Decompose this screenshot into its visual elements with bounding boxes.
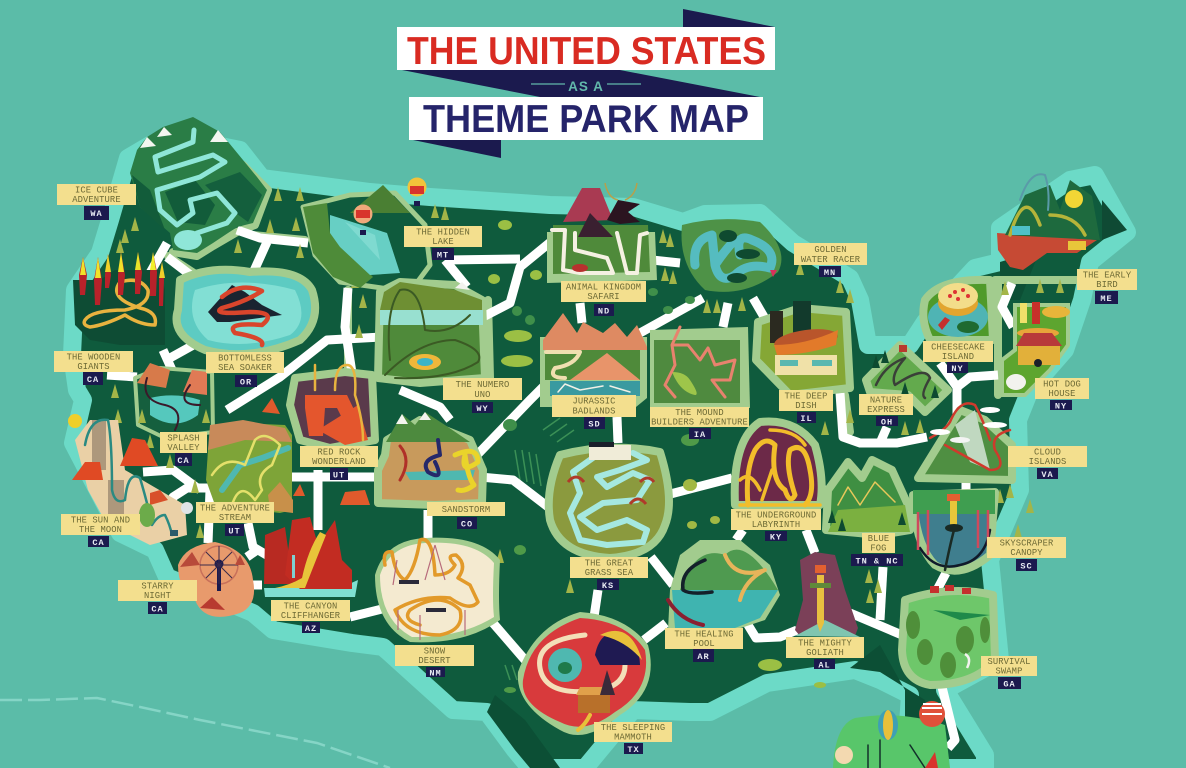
label: The Wooden Giants CA: [54, 351, 133, 385]
label: The Healing Pool AR: [665, 628, 743, 662]
label: Cheesecake Island NY: ISLAND: [942, 352, 974, 362]
label: Red Rock Wonderland UT: [300, 446, 378, 480]
label: Skyscraper Canopy SC: SKYSCRAPER: [1000, 538, 1054, 548]
label: Survival Swamp GA: [981, 656, 1037, 690]
label: The Sleeping Mammoth TX: TX: [627, 745, 640, 755]
scattered trees and bushes: [111, 187, 1064, 693]
label: Bottomless Sea Soaker OR: OR: [240, 378, 252, 388]
clouds: [980, 407, 1000, 413]
label: The Great Grass Sea KS: [570, 557, 648, 591]
label: Jurassic Badlands SD: BADLANDS: [572, 406, 616, 416]
sun: [68, 414, 82, 428]
label: The Numero Uno WY: WY: [476, 404, 489, 414]
sand road: [546, 352, 580, 378]
park: Sandstorm: [378, 412, 483, 505]
yellow veins: [747, 441, 812, 505]
label: The Healing Pool AR: THE HEALING: [674, 630, 734, 640]
moat: [928, 297, 988, 337]
label: Animal Kingdom Safari ND: SAFARI: [587, 292, 620, 302]
red slide: [668, 600, 703, 625]
label: The Canyon Cliffhanger AZ: THE CANYON: [284, 602, 337, 612]
teal rivers: [695, 235, 772, 278]
park: Snow Desert: [375, 538, 500, 642]
green hills: [680, 550, 778, 590]
lake inner: [192, 282, 301, 344]
subtitle: as a: [531, 79, 641, 94]
label: The Mighty Goliath AL: [786, 637, 864, 670]
label: Ice Cube Adventure WA: [57, 184, 136, 220]
label: The Mighty Goliath AL: GOLIATH: [806, 648, 844, 658]
dark trees: [872, 355, 880, 368]
dark forest patches: [132, 172, 262, 230]
label: Animal Kingdom Safari ND: ND: [598, 306, 610, 316]
label: The Canyon Cliffhanger AZ: [271, 600, 350, 634]
cream track: [540, 635, 625, 692]
park: Red Rock Wonderland: [290, 365, 375, 448]
park: The Mighty Goliath: [795, 552, 860, 637]
park: The Underground Labyrinth: [735, 421, 822, 505]
label: The Early Bird ME: THE EARLY: [1083, 270, 1132, 280]
snow peaks: [455, 282, 470, 290]
volcano: [563, 188, 613, 222]
label: Snow Desert NM: NM: [429, 668, 442, 678]
grey rail: [876, 358, 930, 398]
label: Snow Desert NM: DESERT: [418, 656, 451, 666]
label: The Sun and the Moon CA: CA: [92, 538, 105, 548]
coaster arc: [1020, 174, 1049, 210]
label: The Sleeping Mammoth TX: [594, 722, 672, 755]
park: Cheesecake Island: [923, 280, 993, 340]
label: Hot Dog House NY: NY: [1055, 402, 1067, 412]
label: Nature Express OH: NATURE: [870, 396, 902, 406]
lake: [330, 215, 400, 275]
label: Jurassic Badlands SD: SD: [588, 420, 601, 430]
label: Cloud Islands VA: CLOUD: [1034, 448, 1061, 458]
coaster track: [385, 290, 479, 378]
label: The Adventure Stream UT: THE ADVENTURE: [200, 504, 270, 514]
red arches: [305, 395, 359, 436]
mammoth: [595, 632, 640, 665]
park: Florida balloons: [833, 701, 950, 768]
label: Cloud Islands VA: [1008, 446, 1087, 480]
label: Animal Kingdom Safari ND: ANIMAL KINGDOM: [566, 282, 641, 292]
title line 1: THE UNITED STATES: [407, 30, 766, 73]
label: The Mound Builders Adventure IA: BUILDERS ADVENTURE: [651, 418, 748, 428]
label: Starry Night CA: [118, 580, 197, 614]
label: The Wooden Giants CA: CA: [87, 375, 99, 385]
label: Cheesecake Island NY: CHEESECAKE: [931, 342, 985, 352]
red slide: [219, 288, 268, 345]
yellow track: [212, 436, 280, 505]
river: [150, 395, 200, 424]
navy ribbons: [402, 9, 775, 158]
label: Bottomless Sea Soaker OR: [206, 352, 284, 388]
label: Hot Dog House NY: [1035, 378, 1089, 412]
ice track: [155, 130, 235, 242]
dashed sea border line: [0, 698, 390, 768]
label: The Hidden Lake MT: THE HIDDEN: [416, 228, 470, 238]
label: Red Rock Wonderland UT: RED ROCK: [317, 448, 361, 458]
park: Hot Dog House: [1002, 302, 1070, 395]
label: The Wooden Giants CA: GIANTS: [77, 362, 110, 372]
field hatching: [505, 418, 574, 700]
label: The Healing Pool AR: AR: [697, 652, 710, 662]
red rocks: [137, 363, 170, 388]
black island: [208, 285, 282, 322]
teal channel: [405, 470, 475, 480]
label: The Hidden Lake MT: MT: [437, 250, 449, 260]
label: Starry Night CA: NIGHT: [144, 591, 171, 601]
label: Golden Water Racer MN: MN: [824, 268, 836, 278]
park: Bottomless Sea Soaker: [177, 270, 315, 354]
park: Golden Water Racer: [681, 219, 781, 292]
hot air balloon: [354, 204, 372, 235]
label: Ice Cube Adventure WA: ICE CUBE: [75, 186, 118, 196]
park: The Deep Dish: [756, 301, 850, 395]
cheesecake: [938, 283, 978, 316]
coaster: [384, 539, 478, 635]
label: The Numero Uno WY: THE NUMERO: [456, 380, 509, 390]
big peak: [570, 353, 640, 380]
label: Hot Dog House NY: HOUSE: [1049, 389, 1075, 399]
yellow slide: [725, 555, 765, 600]
coaster track: [84, 280, 155, 327]
trestle: [393, 545, 465, 640]
label: The Sun and the Moon CA: THE SUN AND: [71, 516, 130, 526]
park: The Early Bird: [997, 174, 1127, 270]
yellow slide: [275, 532, 326, 588]
label: Nature Express OH: [859, 394, 913, 428]
red cliffs: [264, 527, 293, 584]
label: Survival Swamp GA: GA: [1003, 680, 1016, 690]
label: Splash Valley CA: SPLASH: [167, 434, 200, 444]
park: Skyscraper Canopy: [913, 490, 995, 571]
roads between parks: [107, 230, 1013, 748]
label: The Great Grass Sea KS: GRASS SEA: [585, 568, 634, 578]
label: Cloud Islands VA: ISLANDS: [1029, 457, 1066, 467]
dark islands: [719, 230, 737, 242]
balloon: small: [835, 746, 853, 764]
red mountains: [543, 313, 647, 350]
label: The Underground Labyrinth KY: LABYRINTH: [752, 520, 800, 530]
label: Skyscraper Canopy SC: CANOPY: [1010, 548, 1043, 558]
park: Animal Kingdom Safari: [547, 183, 657, 283]
park: Survival Swamp: [902, 585, 995, 685]
pink trunks: [918, 510, 988, 555]
yellow track: [838, 482, 895, 505]
title line 2: THEME PARK MAP: [423, 98, 749, 141]
label: Bottomless Sea Soaker OR: BOTTOMLESS: [218, 354, 272, 364]
label: Cheesecake Island NY: NY: [951, 364, 964, 374]
label: The Canyon Cliffhanger AZ: CLIFFHANGER: [281, 611, 341, 621]
label: Splash Valley CA: VALLEY: [167, 443, 200, 453]
label: Nature Express OH: EXPRESS: [867, 405, 905, 415]
label: The Hidden Lake MT: [404, 226, 482, 260]
label: The Underground Labyrinth KY: KY: [770, 532, 782, 542]
black slide: [683, 560, 712, 593]
label: Jurassic Badlands SD: [552, 395, 636, 430]
label: Jurassic Badlands SD: JURASSIC: [572, 396, 616, 406]
pale green zones along roads: [168, 165, 1078, 432]
dark mountain: [1005, 180, 1100, 240]
label: Golden Water Racer MN: GOLDEN: [814, 245, 847, 255]
label: The Adventure Stream UT: [196, 502, 274, 536]
label: The Early Bird ME: ME: [1100, 294, 1113, 304]
dark lake rim: [920, 530, 990, 567]
label: The Early Bird ME: BIRD: [1096, 280, 1118, 290]
label: The Mound Builders Adventure IA: [650, 407, 749, 440]
park: Blue Fog: [826, 460, 910, 535]
red signs: [930, 586, 939, 593]
label: The Adventure Stream UT: STREAM: [219, 513, 251, 523]
label: The Canyon Cliffhanger AZ: AZ: [305, 624, 317, 634]
park: The Sun and the Moon: [68, 414, 193, 545]
giant red trees: [79, 252, 165, 306]
label: Red Rock Wonderland UT: WONDERLAND: [312, 457, 366, 467]
label: Red Rock Wonderland UT: UT: [333, 470, 345, 480]
ferris wheel: [200, 546, 238, 591]
label: The Healing Pool AR: POOL: [693, 639, 715, 649]
park: The Numero Uno: [378, 282, 485, 383]
mountain: [350, 185, 410, 213]
label: Survival Swamp GA: SWAMP: [996, 666, 1022, 676]
label: Ice Cube Adventure WA: WA: [90, 209, 103, 219]
red slide: [400, 446, 406, 480]
label: The Deep Dish IL: [779, 390, 833, 424]
teal stream: [222, 448, 288, 490]
label: Blue Fog TN and NC: [851, 533, 903, 566]
park: Jurassic Badlands: [540, 313, 647, 407]
hot dog tent: [1016, 328, 1062, 367]
yellow curves: [1010, 207, 1085, 235]
park: The Great Grass Sea: [549, 442, 669, 558]
label: Survival Swamp GA: SURVIVAL: [987, 657, 1031, 667]
label: The Early Bird ME: [1077, 269, 1137, 304]
label: Hot Dog House NY: HOT DOG: [1043, 380, 1081, 390]
tower: [793, 301, 811, 346]
tower: [950, 495, 957, 525]
label: Snow Desert NM: SNOW: [424, 646, 446, 656]
lodge: [589, 445, 631, 460]
pizza dish: [773, 326, 839, 375]
park: Starry Night: [178, 542, 254, 617]
label: Starry Night CA: STARRY: [141, 582, 174, 592]
red rocks: [120, 438, 158, 466]
label: Sandstorm CO: SANDSTORM: [442, 505, 490, 515]
red bridges: [568, 477, 654, 504]
park: The Hidden Lake: [303, 178, 430, 292]
subtitle: as a: AS A: [568, 79, 604, 94]
olive upper slope: [380, 282, 482, 310]
moose: [605, 183, 640, 224]
park: Nature Express: [866, 345, 948, 412]
label: Cheesecake Island NY: [923, 341, 993, 374]
label: Sandstorm CO: CO: [461, 520, 473, 530]
park: Ice Cube Adventure: [130, 117, 267, 253]
label: The Deep Dish IL: IL: [800, 414, 813, 424]
balloon: yellow and blue: [878, 710, 898, 740]
label: The Sun and the Moon CA: THE MOON: [79, 525, 122, 535]
park: The Healing Pool: [668, 540, 780, 630]
yellow track: [315, 365, 363, 440]
teal fossil strip: [550, 381, 640, 396]
label: Animal Kingdom Safari ND: [561, 281, 646, 316]
label: Cloud Islands VA: VA: [1041, 470, 1054, 480]
label: The Great Grass Sea KS: THE GREAT: [585, 558, 633, 568]
crocodile: [933, 610, 990, 620]
label: The Mighty Goliath AL: AL: [818, 660, 831, 670]
label: Golden Water Racer MN: [794, 243, 867, 278]
buildings: [1020, 303, 1027, 323]
label: Golden Water Racer MN: WATER RACER: [801, 255, 861, 265]
label: The Deep Dish IL: THE DEEP: [784, 392, 828, 402]
label: Bottomless Sea Soaker OR: SEA SOAKER: [218, 363, 273, 373]
golden sword: [817, 575, 824, 623]
label: The Mound Builders Adventure IA: THE MOUND: [675, 408, 724, 418]
white safari track: [552, 230, 647, 273]
label: Splash Valley CA: [160, 432, 207, 466]
label: Splash Valley CA: CA: [177, 456, 190, 466]
yellow slide: [455, 451, 478, 490]
label: Blue Fog TN and NC: TN & NC: [855, 556, 899, 566]
teal pool: [672, 590, 778, 628]
label: Blue Fog TN and NC: FOG: [870, 544, 887, 554]
green coaster: [85, 420, 172, 535]
swamp trees: [906, 611, 920, 639]
light mound: [672, 372, 697, 395]
label: The Great Grass Sea KS: KS: [602, 581, 614, 591]
tan cliffs: [208, 420, 292, 450]
label: Ice Cube Adventure WA: ADVENTURE: [72, 195, 121, 205]
label: The Numero Uno WY: [443, 378, 522, 414]
label: Starry Night CA: CA: [151, 604, 164, 614]
label: The Underground Labyrinth KY: [731, 509, 821, 542]
winding river: [570, 453, 650, 545]
park: Cloud Islands: [918, 403, 1012, 480]
label: Snow Desert NM: [395, 645, 474, 678]
park: The Sleeping Mammoth: [518, 612, 651, 735]
label: The Sleeping Mammoth TX: MAMMOTH: [614, 732, 652, 742]
pool circle: [548, 648, 582, 682]
label: The Underground Labyrinth KY: THE UNDERGROUND: [736, 510, 816, 520]
label: Nature Express OH: OH: [881, 418, 893, 428]
snow peaks: [140, 127, 228, 148]
label: The Mighty Goliath AL: THE MIGHTY: [798, 638, 853, 648]
red coaster: [930, 403, 1010, 470]
label: The Sun and the Moon CA: [61, 514, 140, 548]
park: Splash Valley: [135, 363, 213, 438]
label: Blue Fog TN and NC: BLUE: [868, 534, 889, 544]
label: The Adventure Stream UT: UT: [228, 526, 241, 536]
label: The Mound Builders Adventure IA: IA: [694, 430, 706, 440]
mountains: [386, 412, 470, 442]
target disc: [409, 354, 441, 370]
pink snake: [665, 327, 735, 397]
label: Skyscraper Canopy SC: [987, 537, 1066, 572]
waterfall band: [380, 310, 483, 325]
blue slide: [426, 440, 440, 475]
green band: [545, 350, 640, 380]
striped towers: [92, 420, 106, 470]
label: The Deep Dish IL: DISH: [795, 401, 817, 411]
park: The Canyon Cliffhanger: [264, 517, 358, 597]
hot air balloon top: [408, 178, 426, 206]
label: The Hidden Lake MT: LAKE: [432, 237, 454, 247]
balloon: red: [919, 701, 945, 727]
label: The Numero Uno WY: UNO: [474, 390, 491, 400]
label: Sandstorm CO: [427, 502, 505, 530]
park: The Adventure Stream: [206, 420, 293, 513]
label: The Wooden Giants CA: THE WOODEN: [67, 352, 120, 362]
cabin: [578, 695, 610, 713]
park: The Mound Builders Adventure: [650, 327, 750, 410]
label: Skyscraper Canopy SC: SC: [1020, 562, 1033, 572]
label: The Sleeping Mammoth TX: THE SLEEPING: [601, 723, 665, 733]
land mass of the United States: [72, 140, 1127, 768]
sun: [1065, 190, 1083, 208]
park: The Wooden Giants: [73, 252, 165, 345]
title banner: [397, 9, 775, 158]
